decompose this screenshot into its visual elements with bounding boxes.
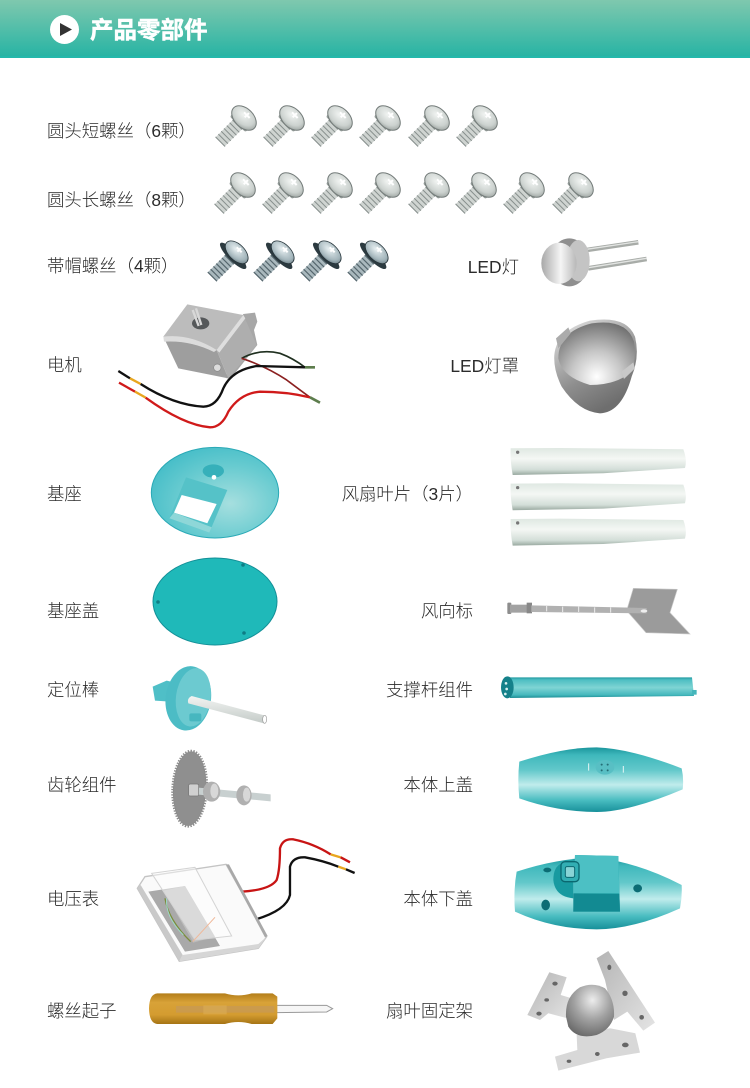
label: base: 基座 xyxy=(47,484,82,504)
icon: four cap screws xyxy=(199,234,395,290)
icon: lower body cover xyxy=(514,855,682,929)
label: blade mount: 扇叶固定架 xyxy=(386,1001,473,1021)
label: LED: LED灯 xyxy=(468,257,519,277)
icon: six short screws xyxy=(210,101,502,152)
icon: positioning rod xyxy=(153,663,267,733)
icon: LED shade xyxy=(554,319,637,413)
label: upper body cover: 本体上盖 xyxy=(403,775,473,795)
label: support rod assembly: 支撑杆组件 xyxy=(386,680,473,700)
icon: base xyxy=(151,447,279,538)
icon: upper body cover xyxy=(518,747,683,812)
icon: motor with wires xyxy=(118,304,320,427)
label: short round-head screws: 圆头短螺丝（6颗） xyxy=(47,121,196,141)
icon: base cover xyxy=(153,558,277,645)
label: long round-head screws: 圆头长螺丝（8颗） xyxy=(47,190,196,210)
label: gear assembly: 齿轮组件 xyxy=(47,775,117,795)
icon: eight long screws xyxy=(209,168,598,219)
label: motor: 电机 xyxy=(47,355,82,375)
header banner xyxy=(0,0,750,58)
label: positioning rod: 定位棒 xyxy=(47,680,99,700)
icon: support rod xyxy=(501,676,697,698)
icon: blade mount xyxy=(527,951,655,1071)
label: voltmeter: 电压表 xyxy=(47,889,99,909)
icon: wind vane xyxy=(507,588,690,634)
icon: gear assembly xyxy=(171,751,271,827)
label: wind vane: 风向标 xyxy=(421,601,473,621)
icon: play button xyxy=(50,15,79,44)
icon: three fan blades xyxy=(511,448,686,546)
label: screwdriver: 螺丝起子 xyxy=(47,1001,117,1021)
icon: LED lamp xyxy=(541,238,647,286)
icon: screwdriver xyxy=(149,993,333,1024)
title: 产品零部件 xyxy=(90,17,208,43)
label: LED shade: LED灯罩 xyxy=(450,356,519,376)
label: cap screws: 帯帽螺丝（4颗） xyxy=(47,256,178,276)
label: fan blades: 风扇叶片（3片） xyxy=(342,484,473,504)
label: base cover: 基座盖 xyxy=(47,601,99,621)
icon: voltmeter xyxy=(137,839,355,961)
label: lower body cover: 本体下盖 xyxy=(403,889,473,909)
